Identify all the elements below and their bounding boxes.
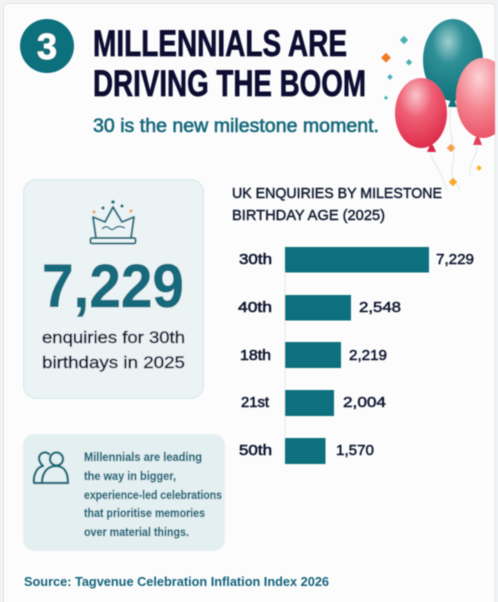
stat caption — [42, 328, 185, 372]
panel: millennials note — [23, 434, 225, 551]
bar: 21st: 21st — [241, 394, 270, 411]
stat caption: enquiries for 30th — [42, 328, 185, 347]
source: Source: Tagvenue Celebration Inflation Index 2026 — [24, 575, 329, 589]
note text: Millennials are leading — [84, 452, 202, 464]
chart title — [232, 186, 442, 224]
bar: 50th: 50th — [239, 442, 272, 459]
title: DRIVING THE BOOM — [93, 63, 366, 104]
bar: 30th: 7,229 — [436, 251, 474, 268]
note text: over material things. — [84, 527, 189, 539]
note text: that prioritise memories — [84, 508, 205, 520]
note text: experience-led celebrations — [84, 490, 222, 502]
bar: 21st: 2,004 — [343, 394, 386, 411]
bar: 40th — [238, 295, 401, 320]
title — [93, 23, 366, 104]
bar: 30th — [239, 247, 474, 272]
bar: 50th: 1,570 — [336, 442, 374, 459]
bar chart — [238, 247, 474, 464]
icon: people — [34, 452, 68, 483]
panel: headline stat — [24, 180, 204, 398]
bar: 30th: 30th — [239, 251, 272, 268]
bar: 21st — [241, 390, 386, 416]
bar: 18th: 2,219 — [349, 347, 387, 364]
bar: 40th: 40th — [238, 299, 272, 316]
big number: 7,229 — [42, 252, 184, 320]
note text: the way in bigger, — [84, 471, 176, 483]
subtitle: 30 is the new milestone moment. — [93, 116, 379, 137]
bar: 18th — [240, 342, 387, 368]
stat caption: birthdays in 2025 — [42, 353, 185, 372]
chart title: UK ENQUIRIES BY MILESTONE — [232, 186, 442, 202]
icon: crown — [90, 200, 136, 244]
bar: 50th — [239, 438, 374, 464]
chart title: BIRTHDAY AGE (2025) — [232, 208, 385, 224]
number badge — [20, 19, 74, 73]
title: MILLENNIALS ARE — [93, 23, 347, 64]
balloons and confetti — [381, 19, 498, 190]
note text — [84, 452, 222, 539]
bar: 18th: 18th — [240, 347, 271, 364]
bar: 40th: 2,548 — [359, 299, 401, 316]
number badge: 3 — [37, 26, 57, 67]
